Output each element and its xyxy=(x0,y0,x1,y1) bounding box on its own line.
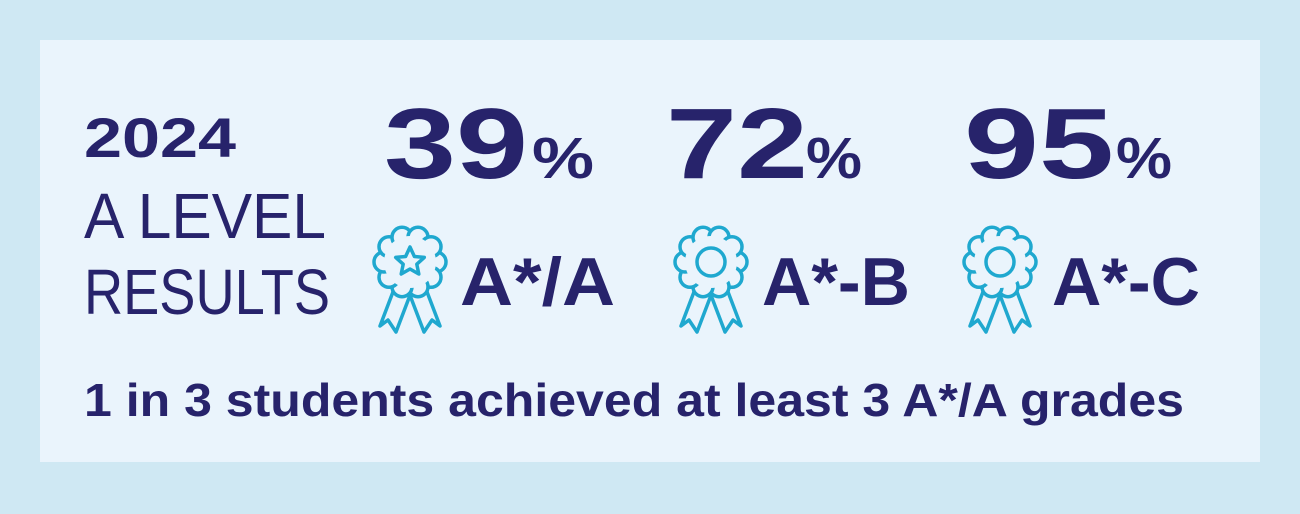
stat: 39% A*/A xyxy=(374,88,615,332)
panel: background xyxy=(40,40,1260,462)
stat: 95% A*-C xyxy=(964,88,1200,332)
icon: rosette with star xyxy=(374,227,446,332)
stat: 39% A*/A: % xyxy=(532,126,594,191)
stat: 95% A*-C: A*-C xyxy=(1052,244,1200,320)
footer statement: 1 in 3 students achieved at least 3 A*/A grades xyxy=(84,374,1184,426)
stat: 72% A*-B: 72 xyxy=(666,88,808,200)
stat: 72% A*-B xyxy=(666,88,910,332)
stat: 95% A*-C: % xyxy=(1116,126,1172,191)
stat: 72% A*-B: % xyxy=(806,126,862,191)
title block: A LEVEL xyxy=(84,180,326,252)
stat: 95% A*-C: 95 xyxy=(964,88,1114,200)
title block xyxy=(84,106,330,328)
icon: rosette xyxy=(675,227,747,332)
title block: RESULTS xyxy=(84,256,330,328)
stat: 72% A*-B: A*-B xyxy=(762,244,910,320)
icon: rosette xyxy=(964,227,1036,332)
stat: 39% A*/A: A*/A xyxy=(460,244,615,320)
title block: 2024 xyxy=(84,106,236,169)
stat: 39% A*/A: 39 xyxy=(384,88,528,200)
